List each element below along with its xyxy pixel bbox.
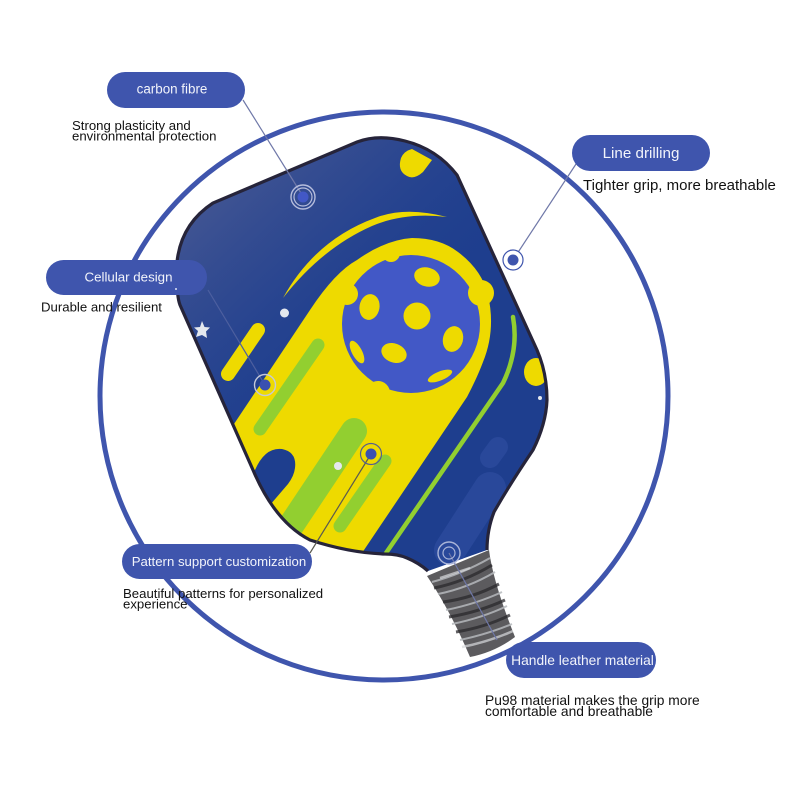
callout: handle: Pu98 material makes the grip more (485, 693, 700, 708)
paddle face (178, 139, 546, 571)
marker: carbon fibre (291, 185, 315, 209)
callout: pattern: Beautiful patterns for personalized (123, 586, 323, 601)
callout: pattern: experience (123, 596, 188, 612)
ball (342, 255, 494, 393)
marker: handle (438, 542, 460, 564)
callout: carbon fibre: carbon fibre (137, 82, 207, 96)
callout: carbon fibre (72, 72, 245, 144)
yellow pill (228, 330, 258, 374)
callout: handle: comfortable and breathable (485, 704, 653, 719)
callout: handle: Handle leather material (511, 653, 654, 668)
callout: cellular design (41, 260, 207, 314)
yellow corner dots (400, 149, 432, 177)
leader lines (208, 100, 578, 640)
callout: pattern: Pattern support customization (132, 554, 306, 569)
marker: cellular design (254, 374, 276, 396)
callout: carbon fibre: Strong plasticity and (72, 118, 191, 133)
green stripes (260, 317, 515, 553)
crescent swoosh (283, 212, 447, 298)
marker: line drilling (503, 250, 523, 270)
handle grip (427, 550, 515, 657)
paddle (176, 136, 549, 657)
navy notch (254, 448, 296, 502)
callout: handle (485, 642, 700, 719)
big blue ring (100, 112, 668, 680)
paddle outline (177, 138, 547, 571)
callout: line drilling: Tighter grip, more breathable (583, 177, 776, 194)
small white dots and star (194, 308, 542, 470)
callout: carbon fibre: environmental protection (72, 128, 216, 144)
faint lighter stripes (450, 447, 498, 550)
callout: line drilling (572, 135, 776, 194)
callout: line drilling: Line drilling (603, 145, 679, 162)
yellow comet (234, 238, 492, 551)
callout: pattern (122, 544, 323, 612)
marker: pattern (360, 444, 382, 464)
callout: cellular design: Cellular design (85, 270, 172, 284)
callout: cellular design: Durable and resilient (41, 300, 162, 314)
